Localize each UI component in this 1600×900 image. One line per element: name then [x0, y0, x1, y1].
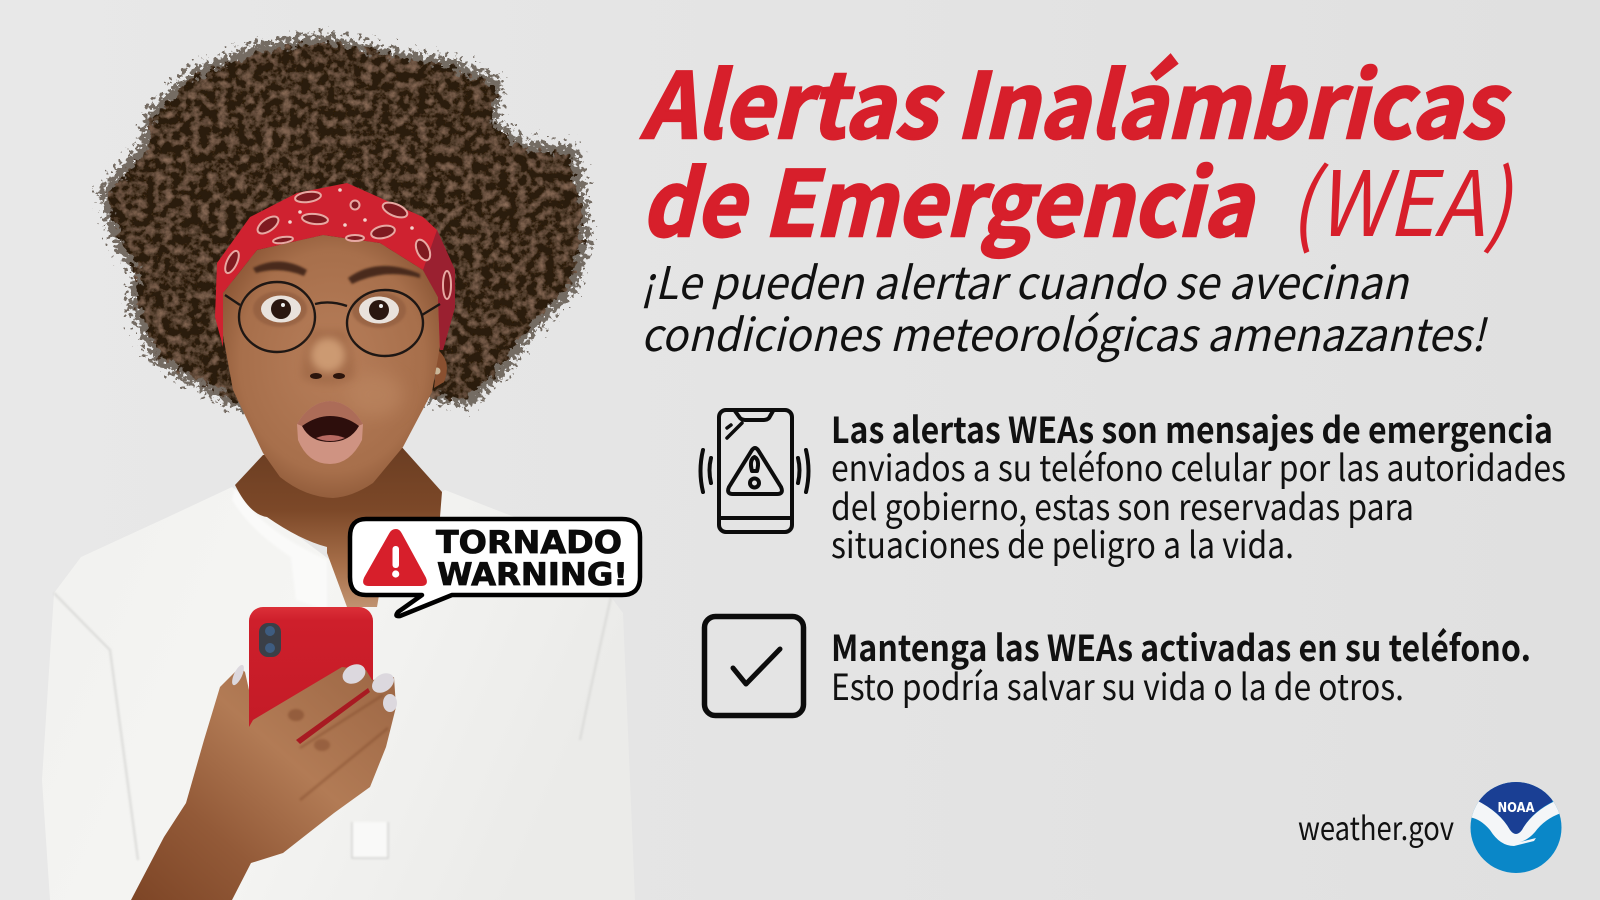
headband — [215, 183, 455, 350]
speech bubble: tornado warning — [350, 519, 640, 616]
website label: weather.gov — [1298, 804, 1454, 850]
subtitle: condiciones meteorológicas amenazantes! — [641, 299, 1488, 364]
text block: keep WEAs on: Mantenga las WEAs activadas en su teléfono. — [831, 620, 1531, 672]
text block: keep WEAs on — [831, 620, 1531, 711]
mouth — [297, 401, 363, 464]
warning text: TORNADO — [436, 525, 622, 561]
photo illustration: surprised woman holding a phone — [42, 33, 635, 900]
shirt — [42, 487, 635, 900]
fingernails — [230, 660, 398, 712]
logo: NOAA — [1470, 782, 1562, 873]
right eye socket — [352, 292, 406, 328]
subtitle: ¡Le pueden alertar cuando se avecinan — [641, 247, 1410, 312]
eyebrows — [253, 261, 420, 284]
icon: red warning triangle — [364, 530, 426, 585]
red smartphone — [249, 607, 373, 742]
title: de Emergencia — [641, 132, 1256, 262]
text block: keep WEAs on: Esto podría salvar su vida o la de otros. — [831, 659, 1404, 711]
bubble outline — [350, 519, 640, 616]
title: Alertas Inalámbricas — [640, 34, 1511, 164]
text block: what WEAs are: situaciones de peligro a la vida. — [831, 517, 1294, 569]
warning text — [436, 525, 628, 593]
text block: what WEAs are: del gobierno, estas son reservadas para — [831, 479, 1414, 531]
hair — [100, 33, 590, 430]
nose — [302, 330, 354, 385]
icon: vibrating phone with warning — [700, 410, 808, 532]
shirt seams and placket — [54, 488, 611, 860]
cheek highlight — [347, 373, 403, 417]
text block: what WEAs are — [831, 402, 1566, 569]
eyes — [261, 296, 399, 324]
subtitle — [641, 247, 1488, 364]
face — [222, 235, 442, 498]
warning text: WARNING! — [437, 557, 628, 593]
ear and earring — [434, 350, 447, 388]
logo: NOAA: NOAA — [1498, 801, 1534, 816]
title — [640, 34, 1514, 262]
title: (WEA) — [1289, 132, 1514, 262]
hand and forearm — [131, 667, 396, 900]
icon: checkbox with check mark — [704, 616, 804, 716]
eye sockets — [253, 291, 307, 327]
neck — [235, 445, 442, 607]
glasses — [225, 282, 440, 356]
